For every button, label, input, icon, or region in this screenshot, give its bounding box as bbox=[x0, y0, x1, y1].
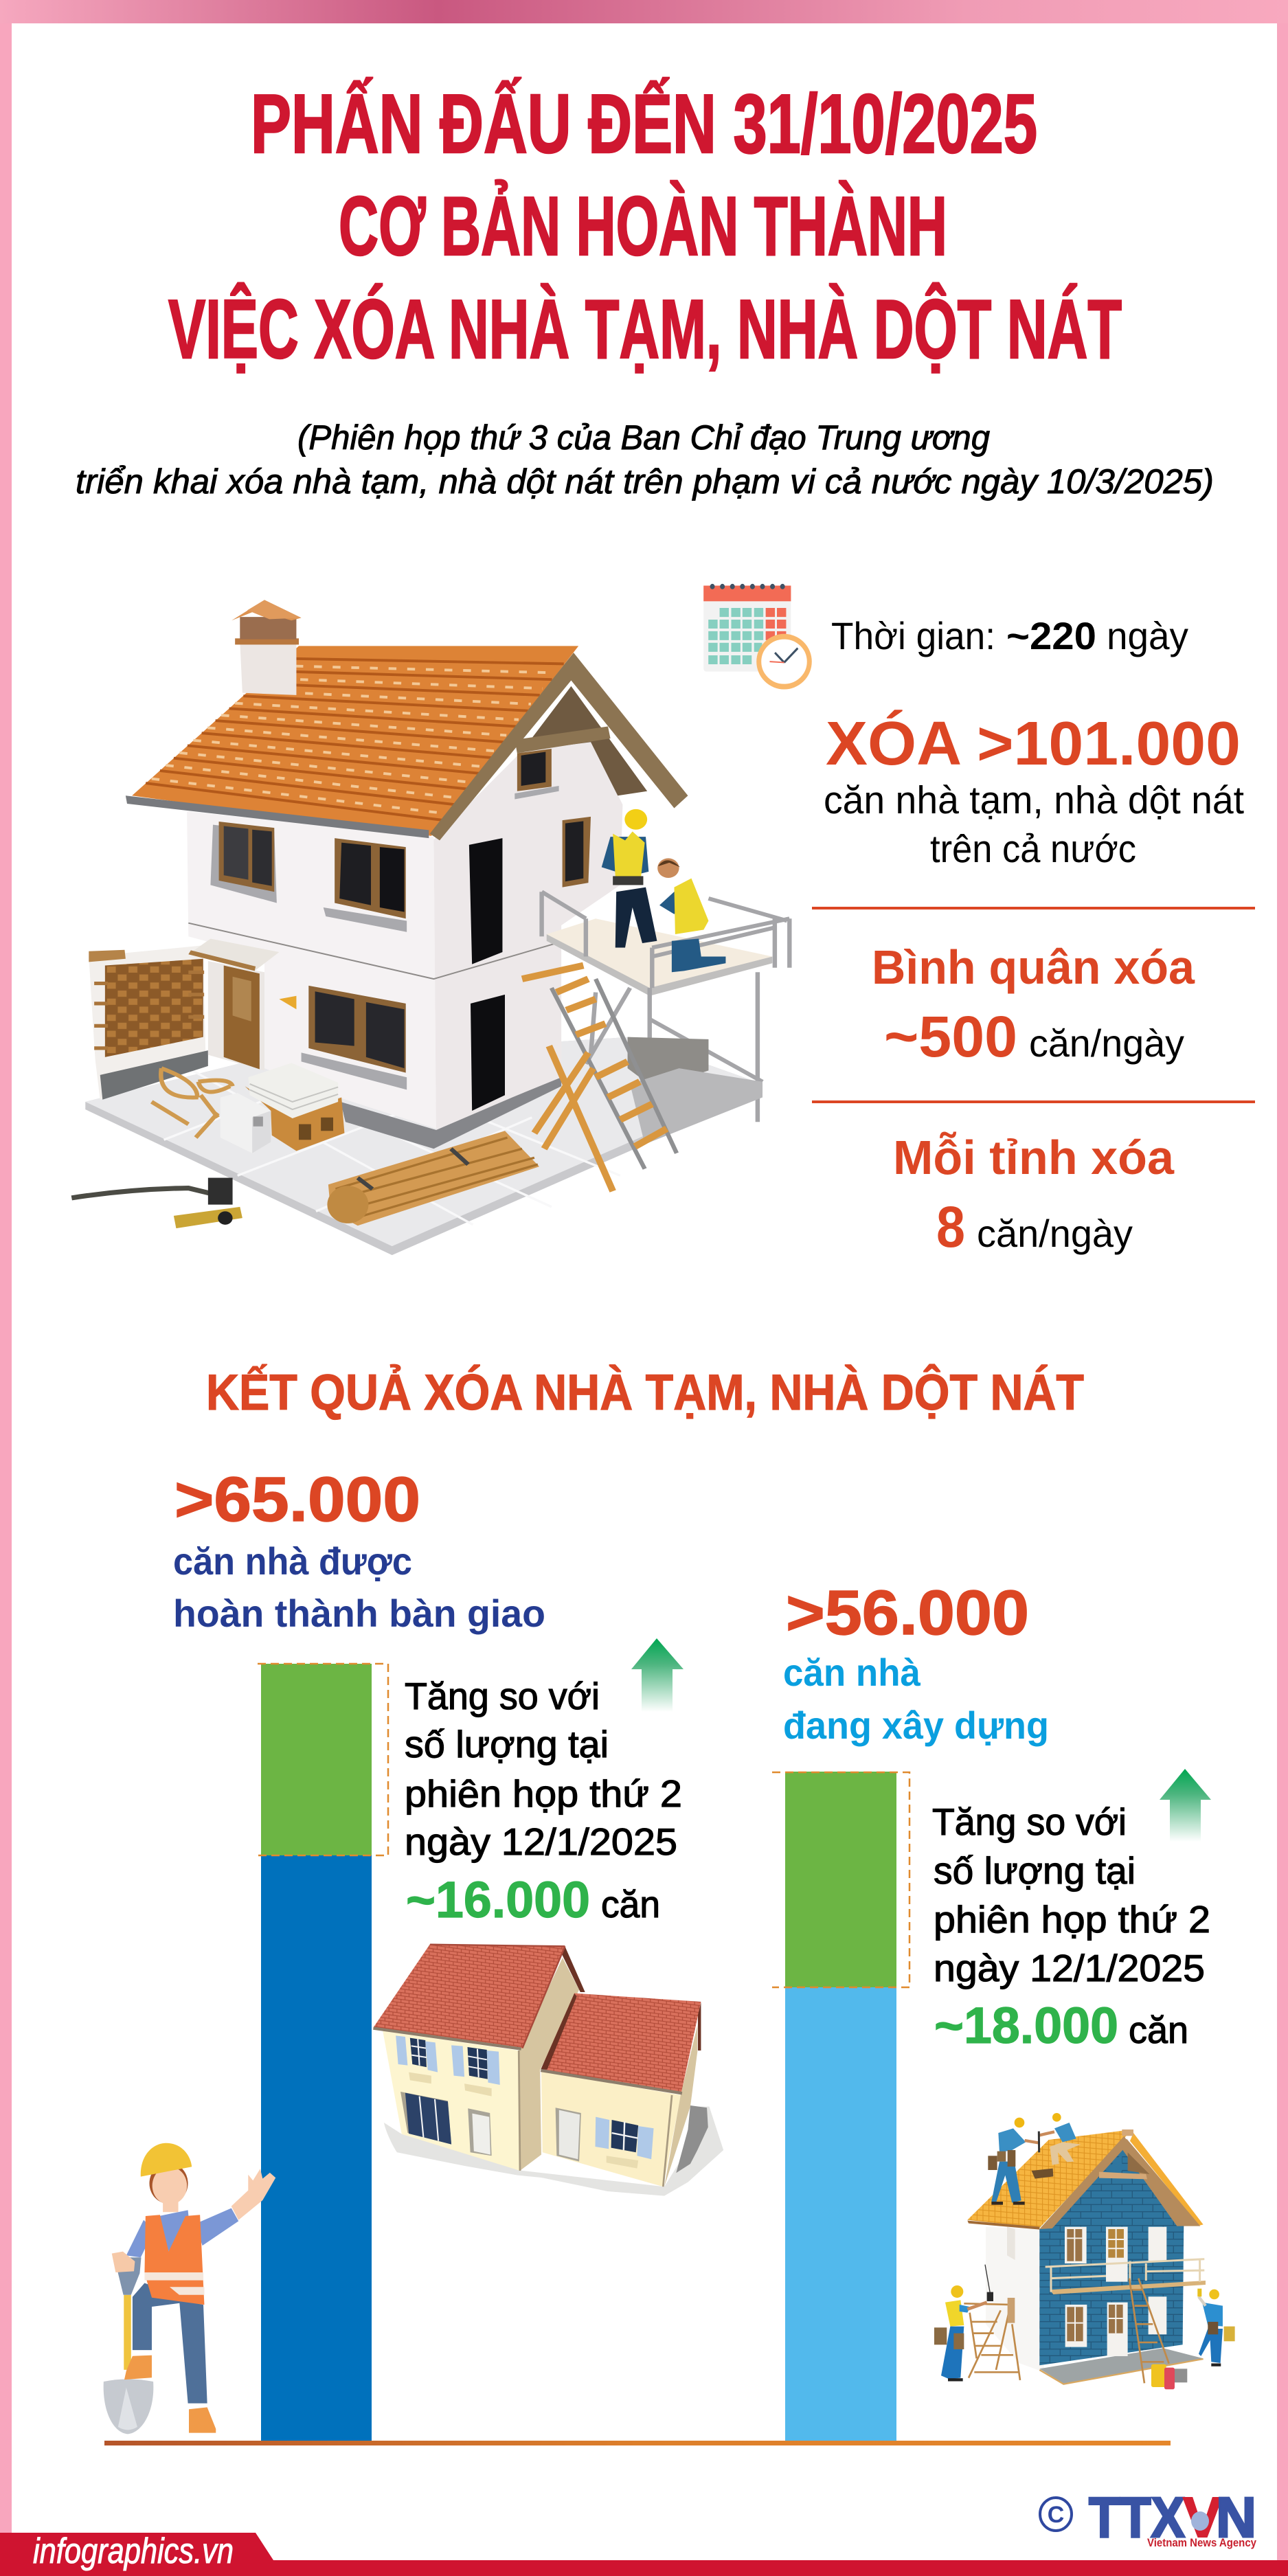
windows bbox=[210, 749, 591, 1111]
stat: average per day: Bình quân xóa bbox=[872, 940, 1195, 994]
stat: per province bbox=[893, 1131, 1175, 1259]
balcony bbox=[1046, 2259, 1206, 2294]
note: completed increase: ~16.000 bbox=[406, 1871, 590, 1928]
chimney bbox=[231, 600, 302, 695]
stat: average per day bbox=[872, 940, 1195, 1069]
kneeling worker bbox=[657, 858, 725, 972]
logo: TTXVN: Vietnam News Agency bbox=[1147, 2536, 1256, 2549]
ground worker left bbox=[934, 2265, 993, 2380]
result: houses under construction: đang xây dựng bbox=[783, 1704, 1049, 1747]
roof worker right bbox=[1032, 2113, 1081, 2179]
result: houses under construction bbox=[783, 1578, 1049, 1747]
note: under construction increase: căn bbox=[1129, 2009, 1188, 2051]
roofs bbox=[373, 1944, 701, 2093]
result: completed houses: căn nhà được bbox=[173, 1539, 412, 1583]
illustration: worker with shovel bbox=[104, 2143, 275, 2434]
result: completed houses: hoàn thành bàn giao bbox=[173, 1592, 545, 1635]
stat: per province: Mỗi tỉnh xóa bbox=[893, 1131, 1175, 1184]
ground worker right bbox=[1197, 2289, 1235, 2365]
note: under construction increase: số lượng tại bbox=[934, 1849, 1136, 1892]
ladders and beams bbox=[522, 966, 762, 1191]
stat: total houses to remove: trên cả nước bbox=[930, 827, 1136, 871]
logo: TTXVN: V bbox=[1183, 2485, 1222, 2549]
note: completed increase: số lượng tại bbox=[405, 1723, 609, 1765]
arrow: increase completed bbox=[631, 1638, 683, 1712]
windows and doors bbox=[1065, 2227, 1166, 2356]
fuel cans bbox=[1151, 2364, 1187, 2389]
logo: TTXVN bbox=[1040, 2485, 1256, 2549]
standing worker bbox=[602, 809, 657, 948]
logo: TTXVN: TTX bbox=[1089, 2485, 1185, 2549]
result: houses under construction: căn nhà bbox=[783, 1651, 921, 1694]
annex brick wall bbox=[89, 945, 208, 1100]
scaffold platform bbox=[542, 892, 789, 1122]
pallet and materials bbox=[221, 1063, 344, 1153]
walls bbox=[986, 2138, 1204, 2384]
subtitle: (Phiên họp thứ 3 của Ban Chỉ đạo Trung ương bbox=[297, 418, 990, 457]
stat: time bbox=[831, 614, 1188, 657]
stat: time: ngày bbox=[1107, 614, 1188, 657]
ground slab bbox=[85, 1037, 762, 1255]
logo: TTXVN: C bbox=[1048, 2502, 1064, 2528]
entrance door and awning bbox=[188, 939, 296, 1070]
house walls bbox=[187, 740, 622, 1149]
roof worker left bbox=[988, 2118, 1039, 2203]
note: under construction increase: Tăng so với bbox=[932, 1800, 1127, 1843]
note: completed increase: căn bbox=[601, 1883, 660, 1925]
note: under construction increase: ngày 12/1/2025 bbox=[934, 1947, 1205, 1989]
bar: under construction bbox=[772, 1772, 909, 2441]
ground line bbox=[104, 2441, 1171, 2445]
note: under construction increase bbox=[932, 1800, 1210, 2054]
note: under construction increase: ~18.000 bbox=[934, 1997, 1118, 2054]
stat: time: ~220 bbox=[1006, 614, 1096, 657]
logo: TTXVN: N bbox=[1216, 2485, 1256, 2549]
icon: clock bbox=[759, 637, 809, 687]
tool bbox=[71, 1178, 242, 1228]
note: completed increase bbox=[405, 1675, 682, 1928]
section heading: KẾT QUẢ XÓA NHÀ TẠM, NHÀ DỘT NÁT bbox=[206, 1365, 1084, 1421]
stat: time: Thời gian: bbox=[831, 614, 995, 657]
note: completed increase: phiên họp thứ 2 bbox=[405, 1772, 682, 1815]
icon: calendar with clock bbox=[703, 586, 809, 687]
stat: total houses to remove bbox=[824, 709, 1244, 871]
stat: total houses to remove: XÓA >101.000 bbox=[826, 709, 1241, 778]
subtitle: triển khai xóa nhà tạm, nhà dột nát trên phạm vi cả nước ngày 10/3/2025) bbox=[76, 462, 1214, 501]
note: completed increase: Tăng so với bbox=[405, 1675, 600, 1717]
arrow: increase under construction bbox=[1160, 1769, 1211, 1842]
roof bbox=[967, 2129, 1204, 2230]
result: completed houses bbox=[173, 1465, 545, 1635]
result: houses under construction: >56.000 bbox=[786, 1578, 1029, 1648]
balcony ladder bbox=[1129, 2279, 1169, 2383]
stat: total houses to remove: căn nhà tạm, nhà dột nát bbox=[824, 778, 1244, 822]
shadow bbox=[384, 2105, 723, 2196]
stat: average per day: ~500 bbox=[884, 1004, 1017, 1069]
roof bbox=[126, 646, 688, 840]
timber bundle bbox=[327, 1131, 539, 1225]
title bbox=[168, 76, 1122, 376]
result: completed houses: >65.000 bbox=[174, 1465, 420, 1535]
footer band bbox=[0, 2531, 1288, 2576]
illustration: house under construction bbox=[71, 600, 789, 1255]
stat: average per day: căn/ngày bbox=[1029, 1021, 1184, 1065]
footer band: infographics.vn bbox=[33, 2531, 234, 2571]
subtitle bbox=[76, 418, 1214, 501]
note: under construction increase: phiên họp thứ 2 bbox=[934, 1898, 1210, 1941]
stat: per province: 8 bbox=[936, 1195, 965, 1259]
title: CƠ BẢN HOÀN THÀNH bbox=[339, 179, 947, 273]
bar: completed bbox=[258, 1664, 388, 2441]
illustration: house with workers bbox=[934, 2113, 1235, 2389]
walls bbox=[383, 1958, 697, 2187]
step ladder bbox=[964, 2298, 1020, 2380]
windows and doors bbox=[396, 2035, 654, 2169]
wooden frames bbox=[152, 1068, 233, 1138]
stat: per province: căn/ngày bbox=[977, 1212, 1133, 1255]
note: completed increase: ngày 12/1/2025 bbox=[405, 1820, 677, 1863]
illustration: finished house bbox=[373, 1944, 723, 2196]
